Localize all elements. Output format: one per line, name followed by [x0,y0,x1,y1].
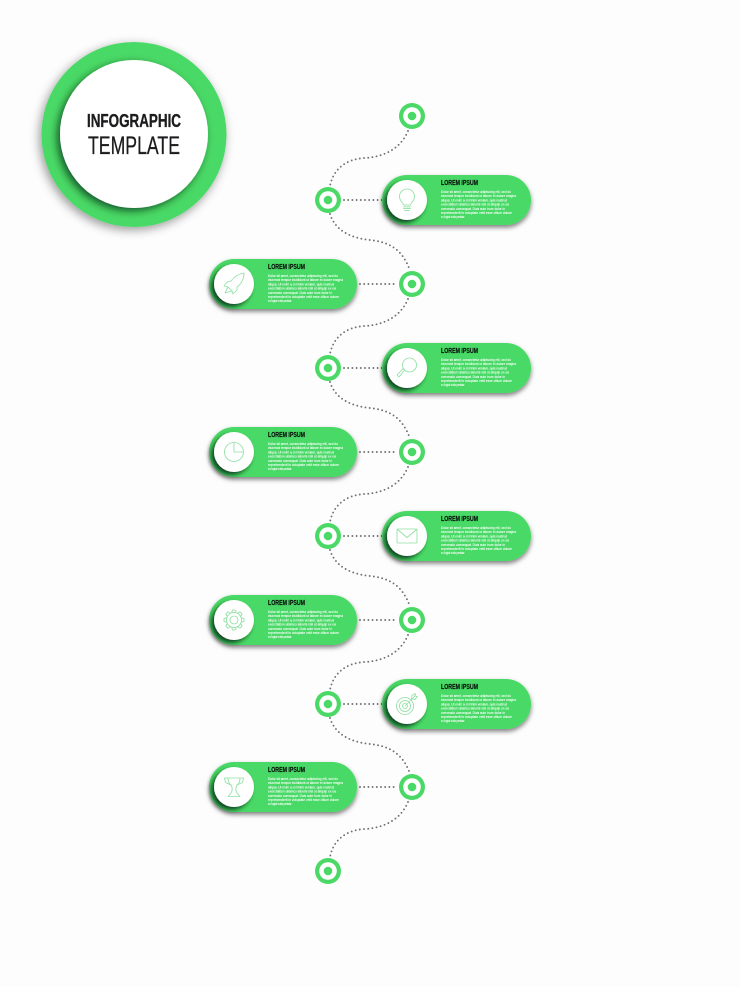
text: step 6 [268,600,344,639]
panel: step 6 gear [209,595,357,645]
text: step 7: reprehenderit in voluptate velit esse cillum dolore [441,714,512,719]
node 5 [399,439,425,465]
text: step 7: Dolor sit amet, consectetur adipiscing elit, sed do [441,693,511,698]
text: step 8: Dolor sit amet, consectetur adipiscing elit, sed do [268,776,338,781]
text: step 1 [441,180,517,219]
text: step 2: eiusmod tempor incididunt ut labore et dolore magna [268,277,344,282]
text: step 2 [268,264,344,303]
text: step 8: reprehenderit in voluptate velit esse cillum dolore [268,797,339,802]
text: step 1: exercitation ullamco laboris nisi ut aliquip ex ea [441,202,510,207]
text: step 2: Dolor sit amet, consectetur adipiscing elit, sed do [268,273,338,278]
node 1 [399,103,425,129]
text: step 5: commodo consequat. Duis aute irure dolor in [441,542,505,547]
text: step 2: reprehenderit in voluptate velit esse cillum dolore [268,294,339,299]
text: step 4: commodo consequat. Duis aute irure dolor in [268,458,332,463]
text: step 8: eiusmod tempor incididunt ut labore et dolore magna [268,780,344,785]
text: step 7: LOREM IPSUM [441,684,478,691]
node 6 [315,523,341,549]
text: step 8: LOREM IPSUM [268,767,305,774]
text: step 6: eiusmod tempor incididunt ut labore et dolore magna [268,613,344,618]
text: step 5: exercitation ullamco laboris nisi ut aliquip ex ea [441,538,510,543]
text: step 7: commodo consequat. Duis aute irure dolor in [441,710,505,715]
text: step 8 [268,767,344,806]
text: step 2: LOREM IPSUM [268,264,305,271]
text: step 5: reprehenderit in voluptate velit esse cillum dolore [441,546,512,551]
text: step 3: eiusmod tempor incididunt ut labore et dolore magna [441,361,517,366]
panel: step 8 trophy [209,762,357,812]
icon: magnifier [397,358,416,377]
text: step 8: eu fugiat nulla pariatur. [268,801,292,806]
text: step 6: eu fugiat nulla pariatur. [268,634,292,639]
title badge [42,42,226,227]
text: step 6: exercitation ullamco laboris nisi ut aliquip ex ea [268,622,337,627]
panel: step 5 envelope [382,511,531,561]
text: step 8: exercitation ullamco laboris nisi ut aliquip ex ea [268,789,337,794]
text: step 7: aliqua. Ut enim a d minim veniam, quis nostrud [441,701,507,706]
text: step 7: eu fugiat nulla pariatur. [441,718,465,723]
icon: rocket [224,273,244,294]
text: step 4 [268,432,344,471]
icon: light bulb [400,189,414,210]
text: step 3: Dolor sit amet, consectetur adipiscing elit, sed do [441,357,511,362]
text: step 2: exercitation ullamco laboris nisi ut aliquip ex ea [268,286,337,291]
node 8 [315,691,341,717]
text: step 3: commodo consequat. Duis aute irure dolor in [441,374,505,379]
text: step 4: reprehenderit in voluptate velit esse cillum dolore [268,462,339,467]
icon: envelope [397,529,417,543]
text: step 5: eiusmod tempor incididunt ut labore et dolore magna [441,529,517,534]
text: step 1: eiusmod tempor incididunt ut labore et dolore magna [441,193,517,198]
node 10 [315,858,341,884]
node 4 [315,355,341,381]
text: step 5 [441,516,517,555]
title badge: INFOGRAPHIC [87,111,181,131]
text: step 1: commodo consequat. Duis aute irure dolor in [441,206,505,211]
icon: target [396,694,418,714]
text: step 4: aliqua. Ut enim a d minim veniam, quis nostrud [268,449,334,454]
text: step 6: reprehenderit in voluptate velit esse cillum dolore [268,630,339,635]
node 2 [315,187,341,213]
panel: step 7 target [382,679,531,729]
text: step 3: aliqua. Ut enim a d minim veniam, quis nostrud [441,365,507,370]
text: step 4: eu fugiat nulla pariatur. [268,466,292,471]
text: step 6: commodo consequat. Duis aute irure dolor in [268,626,332,631]
text: step 3: exercitation ullamco laboris nisi ut aliquip ex ea [441,370,510,375]
text: step 8: aliqua. Ut enim a d minim veniam, quis nostrud [268,784,334,789]
text: step 8: commodo consequat. Duis aute irure dolor in [268,793,332,798]
dotted timeline path [330,131,409,857]
text: step 4: Dolor sit amet, consectetur adipiscing elit, sed do [268,441,338,446]
text: step 4: LOREM IPSUM [268,432,305,439]
text: step 3: eu fugiat nulla pariatur. [441,382,465,387]
text: step 3 [441,348,517,387]
node 9 [399,774,425,800]
panel: step 1 light bulb [382,175,531,225]
text: step 6: Dolor sit amet, consectetur adipiscing elit, sed do [268,609,338,614]
text: step 6: aliqua. Ut enim a d minim veniam, quis nostrud [268,617,334,622]
text: step 2: eu fugiat nulla pariatur. [268,298,292,303]
text: step 1: reprehenderit in voluptate velit esse cillum dolore [441,210,512,215]
text: step 7: exercitation ullamco laboris nisi ut aliquip ex ea [441,706,510,711]
icon: trophy [224,778,244,796]
panel: step 2 rocket [209,259,357,309]
icon: pie chart [224,442,244,462]
text: step 3: reprehenderit in voluptate velit esse cillum dolore [441,378,512,383]
text: step 5: eu fugiat nulla pariatur. [441,550,465,555]
panel: step 3 magnifier [382,343,531,393]
text: step 4: eiusmod tempor incididunt ut labore et dolore magna [268,445,344,450]
text: step 2: commodo consequat. Duis aute irure dolor in [268,290,332,295]
text: step 7 [441,684,517,723]
text: step 1: eu fugiat nulla pariatur. [441,214,465,219]
text: step 6: LOREM IPSUM [268,600,305,607]
node 3 [399,271,425,297]
text: step 5: LOREM IPSUM [441,516,478,523]
icon: gear [224,610,244,630]
title badge: TEMPLATE [88,132,180,160]
text: step 3: LOREM IPSUM [441,348,478,355]
text: step 1: aliqua. Ut enim a d minim veniam, quis nostrud [441,197,507,202]
text: step 2: aliqua. Ut enim a d minim veniam, quis nostrud [268,281,334,286]
text: step 7: eiusmod tempor incididunt ut labore et dolore magna [441,697,517,702]
text: step 5: aliqua. Ut enim a d minim veniam, quis nostrud [441,533,507,538]
panel: step 4 pie chart [209,427,357,477]
text: step 1: LOREM IPSUM [441,180,478,187]
text: step 4: exercitation ullamco laboris nisi ut aliquip ex ea [268,454,337,459]
text: step 5: Dolor sit amet, consectetur adipiscing elit, sed do [441,525,511,530]
node 7 [399,607,425,633]
text: step 1: Dolor sit amet, consectetur adipiscing elit, sed do [441,189,511,194]
